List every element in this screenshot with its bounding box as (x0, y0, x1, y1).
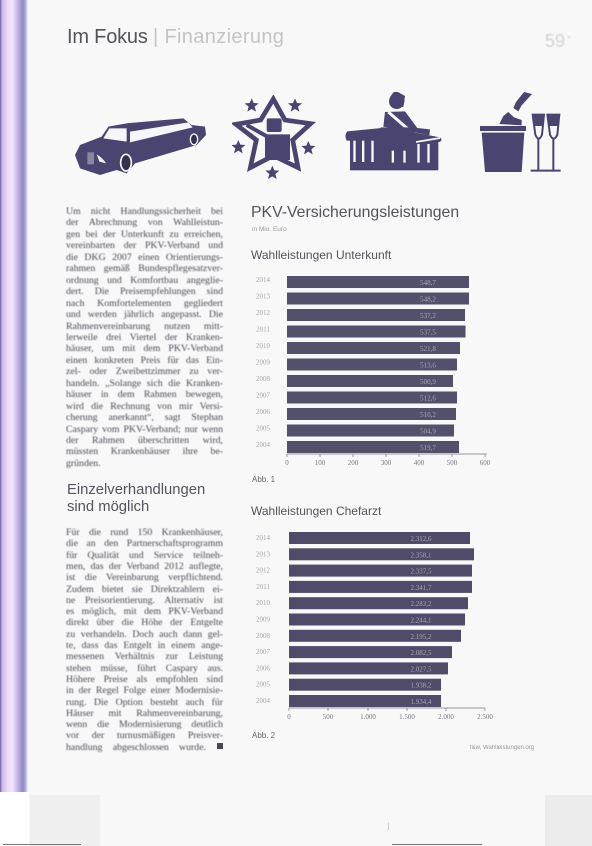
text block: intro column: vereinbarten der PKV-Verband und (66, 240, 223, 251)
heading: Einzelverhandlungen: Einzelverhandlungen (67, 482, 205, 498)
bar chart: Wahlleistungen Unterkunft: 500,9 (420, 378, 436, 386)
bar chart: Wahlleistungen Chefarzt: 2.082,5 (410, 649, 432, 657)
bar chart: Wahlleistungen Chefarzt: 500 (323, 713, 334, 721)
crop mark right (392, 844, 482, 845)
text block: second column part: vor der turnusmäßigen Preisver- (66, 730, 223, 741)
bar chart: Wahlleistungen Chefarzt: 2011 (256, 583, 270, 591)
bar chart: Wahlleistungen Chefarzt: 2010 (256, 599, 270, 607)
text block: intro column: müssten Krankenhäuser ihre be- (66, 446, 223, 457)
bar chart: Wahlleistungen Chefarzt: 2.000 (438, 713, 454, 721)
bar chart: Wahlleistungen Chefarzt: 2.358,1 (410, 551, 432, 559)
text block: second column part: Häuser mit Rahmenvereinbarung, (66, 708, 223, 719)
text block: intro column: der Rahmen überschritten wird, (66, 435, 223, 446)
text block: second column part (66, 527, 224, 753)
bar chart: Wahlleistungen Chefarzt: 2007 (256, 648, 270, 656)
crop mark left (3, 844, 81, 845)
heading: PKV-Versicherungsleistungen: PKV-Versicherungsleistungen (251, 204, 459, 221)
icon: star with person (232, 95, 316, 179)
text block: second column part: Für die rund 150 Krankenhäuser, (66, 527, 223, 538)
bar chart: Wahlleistungen Chefarzt (256, 532, 493, 721)
bar chart: Wahlleistungen Unterkunft: 513,6 (420, 362, 436, 370)
bar chart: Wahlleistungen Unterkunft: 0 (285, 459, 289, 467)
text block: intro column: die DKG 2007 einen Orientierungs- (66, 252, 223, 263)
text block: second column part: messenen Verhältnis zur Leistung (66, 651, 223, 662)
text block: second column part: stehen müsse, führt Caspary aus. (66, 663, 223, 674)
bar chart: Wahlleistungen Unterkunft: 200 (348, 459, 359, 467)
text block: intro column: zel- oder Zweibettzimmer zu ver- (66, 366, 223, 377)
bar chart: Wahlleistungen Chefarzt: 2004 (256, 697, 270, 705)
icon: champagne bucket and glasses (480, 92, 561, 172)
heading: Einzelverhandlungen: sind möglich (67, 499, 149, 515)
icon: limousine (75, 118, 206, 175)
bar chart: Wahlleistungen Chefarzt: 1.500 (399, 713, 415, 721)
bar chart: Wahlleistungen Chefarzt: 2.244,1 (410, 616, 432, 624)
text block: intro column: handeln. „Solange sich die Kranken- (66, 378, 223, 389)
icon: massage table (346, 92, 442, 170)
text block: second column part: Höhere Preise als empfohlen sind (66, 674, 223, 685)
bar chart: Wahlleistungen Unterkunft: 548,2 (420, 296, 436, 304)
bar chart: Wahlleistungen Chefarzt: 1.938,2 (410, 682, 432, 690)
text block: second column part: men, das der Verband 2012 auflegte, (66, 561, 223, 572)
bar chart: Wahlleistungen Unterkunft: 600 (480, 459, 491, 467)
text block: intro column: cherung anerkannt“, sagt Stephan (66, 412, 223, 423)
bar chart: Wahlleistungen Chefarzt: 2013 (256, 550, 270, 558)
text block: intro column: wird die Rechnung von mir Versi- (66, 401, 223, 412)
bar chart: Wahlleistungen Unterkunft: 2004 (256, 441, 270, 449)
bar chart: Wahlleistungen Unterkunft: 2012 (256, 309, 270, 317)
bar chart: Wahlleistungen Chefarzt: 2005 (256, 681, 270, 689)
text block: intro column: der Abrechnung von Wahlleistun- (66, 217, 223, 228)
text block: intro column: gen bei der Unterkunft zu erreichen, (66, 229, 223, 240)
text block: intro column: dert. Die Preisempfehlungen sind (66, 286, 223, 297)
bar chart: Wahlleistungen Unterkunft: 521,8 (420, 345, 436, 353)
bar chart: Wahlleistungen Unterkunft: 2008 (256, 375, 270, 383)
caption: Abb. 1: Abb. 1 (252, 475, 275, 484)
bar chart: Wahlleistungen Unterkunft: 548,7 (420, 279, 436, 287)
bar chart: Wahlleistungen Chefarzt: 2.337,5 (410, 568, 432, 576)
spine bottom margin (0, 792, 29, 846)
bar chart: Wahlleistungen Chefarzt: 2.312,6 (410, 535, 432, 543)
bar chart: Wahlleistungen Chefarzt: 2.195,2 (410, 633, 432, 641)
text block: second column part: die an den Partnerschaftsprogramm (66, 538, 223, 549)
bar chart: Wahlleistungen Unterkunft: 2011 (256, 326, 270, 334)
bar chart: Wahlleistungen Unterkunft: 500 (447, 459, 458, 467)
chart heading: Chefarzt: Wahlleistungen Chefarzt (251, 504, 381, 518)
source note: f&w, Wahlleistungen.org (470, 745, 534, 751)
bar chart: Wahlleistungen Chefarzt: 2008 (256, 632, 270, 640)
text block: second column part: Zudem bietet sie Direktzahlern ei- (66, 584, 223, 594)
text block: intro column: Um nicht Handlungssicherheit bei (66, 206, 223, 217)
bar chart: Wahlleistungen Unterkunft: 2007 (256, 392, 270, 400)
text block: second column part: handlung abgeschlossen wurde. (66, 742, 206, 753)
bar chart: Wahlleistungen Unterkunft: 519,7 (420, 444, 436, 452)
bar chart: Wahlleistungen Unterkunft: 2009 (256, 358, 270, 366)
text block: intro column: gründen. (66, 458, 101, 469)
bar chart: Wahlleistungen Unterkunft: 2010 (256, 342, 270, 350)
bar chart: Wahlleistungen Chefarzt: 1.000 (360, 713, 376, 721)
text block: intro column: häuser, um mit dem PKV-Verband (66, 343, 223, 354)
text block: second column part: für Qualität und Service teilneh- (66, 550, 223, 561)
text block: intro column: ordnung und Komfortbau angeglie- (66, 275, 223, 286)
bottom left shade (30, 795, 100, 846)
text block: intro column: lerweile drei Viertel der Kranken- (66, 332, 223, 343)
bar chart: Wahlleistungen Unterkunft (256, 276, 491, 467)
text block: second column part: wenn die Modernisierung deutlich (66, 719, 223, 730)
bottom right shade (545, 795, 592, 846)
text block: intro column (66, 206, 224, 469)
text block: second column part: in der Regel Folge einer Modernisie- (66, 685, 223, 696)
bar chart: Wahlleistungen Unterkunft: 2014 (256, 276, 270, 284)
end mark (217, 743, 223, 749)
text block: second column part: te, dass das Entgelt in einem ange- (66, 640, 223, 651)
bar chart: Wahlleistungen Unterkunft: 504,9 (420, 428, 436, 436)
text block: second column part: es möglich, mit dem PKV-Verband (66, 606, 223, 617)
text block: intro column: häuser in dem Rahmen bewegen, (66, 389, 223, 400)
page number: 59 » (545, 31, 571, 51)
bar chart: Wahlleistungen Chefarzt: 2014 (256, 534, 270, 542)
bar chart: Wahlleistungen Chefarzt: 2006 (256, 664, 270, 672)
bar chart: Wahlleistungen Unterkunft: 300 (381, 459, 392, 467)
bar chart: Wahlleistungen Chefarzt: 2.283,2 (410, 600, 432, 608)
header title: Im Fokus | Finanzierung (67, 26, 284, 48)
bar chart: Wahlleistungen Chefarzt: 2.027,5 (410, 665, 432, 673)
subheading: unit: in Mio. Euro (252, 226, 287, 233)
crop mark center (388, 823, 389, 830)
bar chart: Wahlleistungen Unterkunft: 2013 (256, 292, 270, 300)
bar chart: Wahlleistungen Unterkunft: 537,2 (420, 312, 436, 320)
text block: intro column: Rahmenvereinbarung nutzen mitt- (66, 320, 223, 332)
text block: second column part: ne Preisorientierung. Alternativ ist (66, 595, 223, 606)
text block: second column part: rung. Die Option besteht auch für (66, 696, 223, 708)
chart heading: Unterkunft: Wahlleistungen Unterkunft (251, 248, 391, 262)
bar chart: Wahlleistungen Chefarzt: 0 (287, 713, 291, 721)
heading: Einzelverhandlungen (67, 482, 205, 515)
text block: intro column: und werden jährlich angepasst. Die (66, 309, 223, 320)
bar chart: Wahlleistungen Unterkunft: 512,6 (420, 394, 436, 402)
bar chart: Wahlleistungen Unterkunft: 400 (414, 459, 425, 467)
bar chart: Wahlleistungen Unterkunft: 2006 (256, 408, 270, 416)
text block: intro column: Caspary vom PKV-Verband; nur wenn (66, 424, 223, 435)
text block: intro column: rahmen gemäß Bundespflegesatzver- (66, 263, 223, 274)
bar chart: Wahlleistungen Chefarzt: 2.500 (477, 713, 493, 721)
bar chart: Wahlleistungen Unterkunft: 510,2 (420, 411, 436, 419)
bar chart: Wahlleistungen Chefarzt: 1.934,4 (410, 698, 432, 706)
text block: second column part: direkt über die Höhe der Entgelte (66, 617, 223, 628)
text block: intro column: einen konkreten Preis für das Ein- (66, 355, 223, 366)
bar chart: Wahlleistungen Unterkunft: 537,5 (420, 328, 436, 336)
page spine (0, 0, 28, 792)
bar chart: Wahlleistungen Unterkunft: 2005 (256, 424, 270, 432)
caption: Abb. 2: Abb. 2 (252, 731, 275, 740)
bar chart: Wahlleistungen Chefarzt: 2009 (256, 616, 270, 624)
text block: intro column: nach Komfortelementen gegliedert (66, 298, 223, 309)
bar chart: Wahlleistungen Chefarzt: 2.341,7 (410, 584, 432, 592)
text block: second column part: ist die Vereinbarung verpflichtend. (66, 572, 223, 583)
bar chart: Wahlleistungen Chefarzt: 2012 (256, 567, 270, 575)
bar chart: Wahlleistungen Unterkunft: 100 (315, 459, 326, 467)
text block: second column part: zu verhandeln. Doch auch dann gel- (66, 629, 223, 640)
